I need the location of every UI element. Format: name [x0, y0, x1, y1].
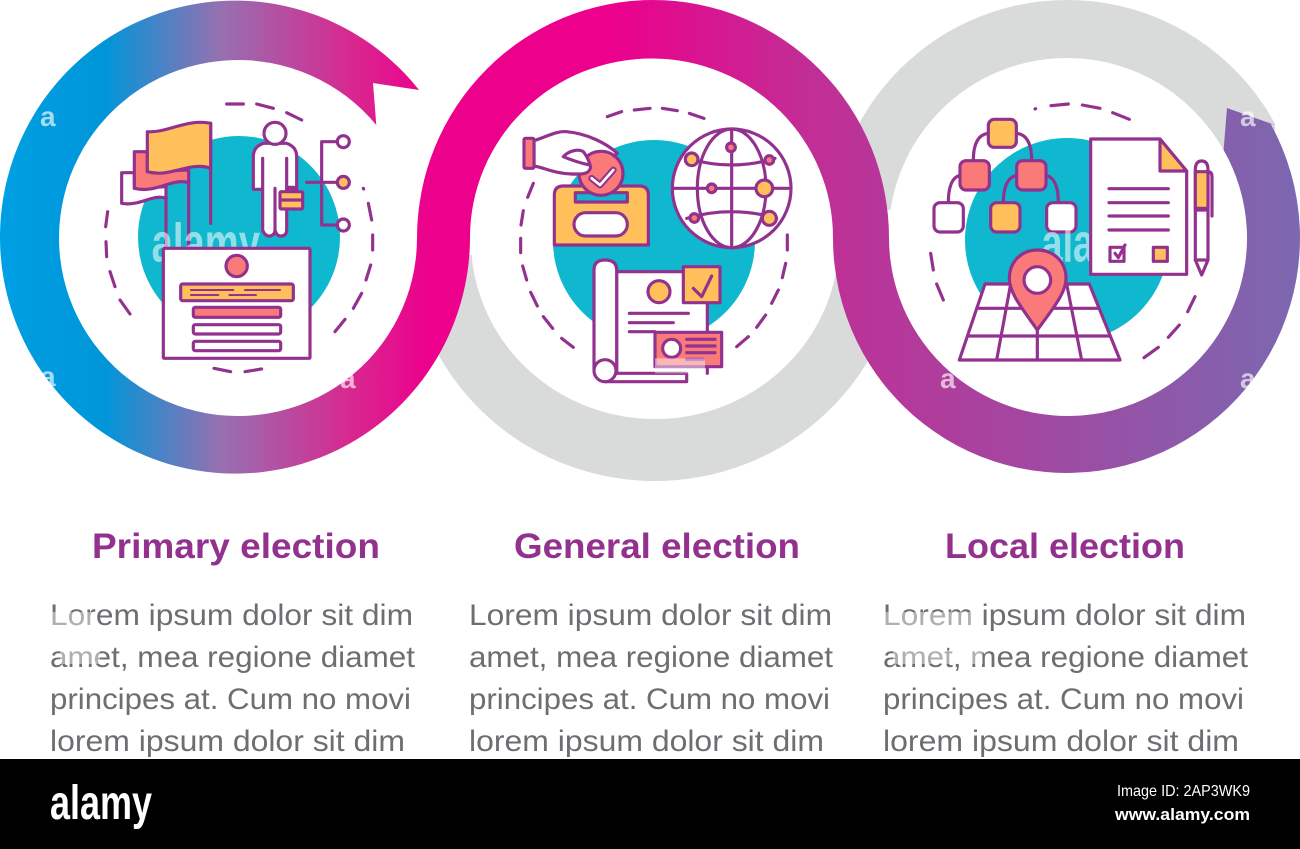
heading: primary election: Primary election [92, 526, 380, 566]
icon group: general election [521, 108, 791, 382]
teal disc: general [553, 140, 755, 342]
body text: primary election: lorem ipsum dolor sit dim [50, 725, 405, 758]
icon: person with briefcase [253, 122, 303, 236]
watermark letters on ribbon [40, 101, 1256, 394]
body text: local election: amet, mea regione diamet [883, 641, 1249, 674]
watermark letters on ribbon: a [1240, 101, 1256, 132]
icon: flags [122, 122, 211, 247]
gradient ribbon linking the three circles [0, 0, 1300, 474]
watermark letters on ribbon: a [940, 363, 956, 394]
body text: local election: lorem ipsum dolor sit dim [883, 725, 1239, 758]
icon: branching nodes [307, 136, 349, 231]
icon: scroll document with check and ID card [594, 260, 722, 382]
icon: document [1091, 139, 1187, 274]
body text: primary election: amet, mea regione diamet [50, 641, 416, 674]
dashed ring [931, 104, 1195, 358]
dashed ring [521, 108, 787, 347]
body text: general election [469, 599, 834, 758]
icon: globe with nodes [672, 129, 791, 248]
body text: general election: Lorem ipsum dolor sit dim [469, 599, 832, 632]
watermark letters on ribbon: a [40, 361, 56, 392]
footer image id: Image ID: 2AP3WK9 [1117, 783, 1250, 800]
body text: local election [883, 599, 1249, 758]
grey ring: middle circle [438, 255, 896, 481]
icon: pen [1195, 161, 1212, 275]
watermark: alamy [1042, 212, 1149, 274]
icon: org tree [934, 119, 1076, 232]
icon: ballot box with hand [524, 132, 648, 245]
body text: primary election: principes at. Cum no movi [50, 683, 411, 716]
icon: map with location pin [959, 250, 1120, 360]
body text: primary election: Lorem ipsum dolor sit dim [50, 599, 413, 632]
watermark letters on ribbon: a [1240, 363, 1256, 394]
teal disc: local [965, 138, 1169, 342]
white interior: right circle [889, 60, 1247, 416]
icon group: primary election [106, 104, 373, 372]
footer logo: alamy [50, 777, 152, 830]
grey ring: right circle [860, 0, 1275, 210]
body text: local election: Lorem ipsum dolor sit dim [883, 599, 1246, 632]
watermark: alamy [152, 212, 260, 274]
body text: local election: principes at. Cum no movi [883, 683, 1244, 716]
dashed ring [106, 104, 373, 372]
footer url: www.alamy.com [1114, 805, 1250, 824]
teal disc: primary [138, 136, 340, 338]
icon: ballot card [163, 248, 310, 358]
watermark letters on ribbon: a [340, 363, 356, 394]
body text: general election: amet, mea regione diamet [469, 641, 834, 674]
body text: primary election [50, 599, 416, 758]
heading: general election: General election [514, 526, 800, 566]
watermark letters on ribbon: a [40, 101, 56, 132]
footer bar [0, 759, 1300, 849]
heading: local election: Local election [945, 526, 1185, 566]
body text: general election: lorem ipsum dolor sit dim [469, 725, 824, 758]
icon group: local election [931, 104, 1212, 360]
body text: general election: principes at. Cum no movi [469, 683, 830, 716]
